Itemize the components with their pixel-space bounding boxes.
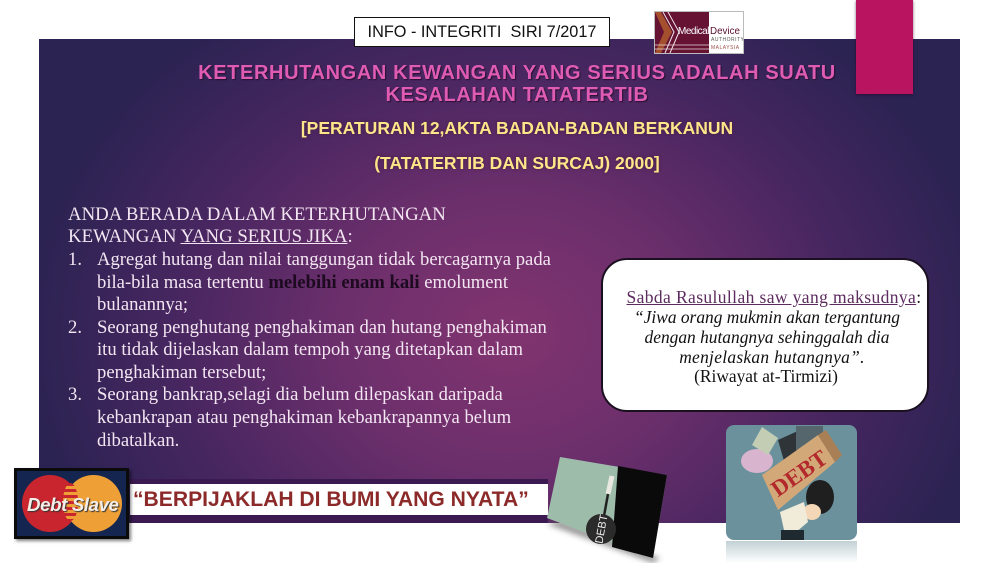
text block: conditions list: 3. — [68, 384, 82, 405]
callout: hadith quote — [601, 258, 929, 412]
illustration: man carrying debt box: DEBT — [766, 445, 832, 502]
text block: conditions list: Agregat hutang dan nilai tanggungan tidak bercagarnya pada — [97, 249, 551, 270]
text block: conditions list: ANDA BERADA DALAM KETERHUTANGAN — [68, 204, 446, 225]
callout: hadith quote: menjelaskan hutangnya”. — [679, 347, 865, 367]
icon: Debt Slave card — [14, 468, 129, 539]
subtitle: regulation reference: (TATATERTIB DAN SURCAJ) 2000] — [374, 153, 660, 173]
logo: Medical Device Authority: MALAYSIA — [711, 45, 740, 51]
callout: hadith quote: (Riwayat at-Tirmizi) — [694, 366, 838, 386]
text block: conditions list: dibatalkan. — [97, 430, 179, 451]
subtitle: regulation reference: [PERATURAN 12,AKTA BADAN-BADAN BERKANUN — [301, 118, 733, 138]
text block: conditions list: penghakiman tersebut; — [97, 362, 266, 383]
illustration: debt ball and chain — [546, 457, 667, 563]
callout: hadith quote: Sabda Rasulullah saw yang maksudnya: — [626, 287, 921, 307]
title — [198, 62, 836, 106]
text block: conditions list: bila-bila masa tertentu melebihi enam kali emolument — [97, 272, 508, 293]
title: KETERHUTANGAN KEWANGAN YANG SERIUS ADALAH SUATU — [198, 62, 836, 84]
callout: hadith quote: “Jiwa orang mukmin akan tergantung — [634, 307, 900, 327]
text block: conditions list: kebankrapan atau penghakiman kebankrapannya belum — [97, 407, 511, 428]
header label box — [354, 17, 610, 47]
header label box: INFO - INTEGRITI SIRI 7/2017 — [368, 23, 596, 41]
text block: conditions list: KEWANGAN YANG SERIUS JIKA: — [68, 226, 353, 247]
pink accent bar — [856, 0, 913, 94]
panel: purple background — [39, 39, 960, 523]
illustration: debt ball and chain: DEBT — [594, 513, 610, 545]
slogan banner: “BERPIJAKLAH DI BUMI YANG NYATA” — [133, 488, 529, 511]
image reflection — [726, 541, 857, 563]
text block: conditions list: 2. — [68, 317, 82, 338]
text block: conditions list: itu tidak dijelaskan dalam tempoh yang ditetapkan dalam — [97, 339, 523, 360]
text block: conditions list: bulanannya; — [97, 294, 188, 315]
text block: conditions list: 1. — [68, 249, 82, 270]
icon: Debt Slave card: Debt Slave — [27, 494, 119, 515]
callout: hadith quote: dengan hutangnya sehinggalah dia — [645, 327, 889, 347]
text block: conditions list: Seorang penghutang penghakiman dan hutang penghakiman — [97, 317, 547, 338]
logo: Medical Device Authority: Device — [710, 26, 740, 37]
illustration: man carrying debt box — [726, 425, 857, 540]
text block: conditions list: Seorang bankrap,selagi dia belum dilepaskan daripada — [97, 384, 503, 405]
logo: Medical Device Authority — [654, 11, 744, 54]
logo: Medical Device Authority: AUTHORITY — [711, 37, 744, 43]
title: KESALAHAN TATATERTIB — [385, 84, 649, 106]
text block: conditions list — [68, 204, 551, 451]
logo: Medical Device Authority: Medical — [678, 26, 709, 37]
subtitle: regulation reference — [300, 118, 733, 174]
